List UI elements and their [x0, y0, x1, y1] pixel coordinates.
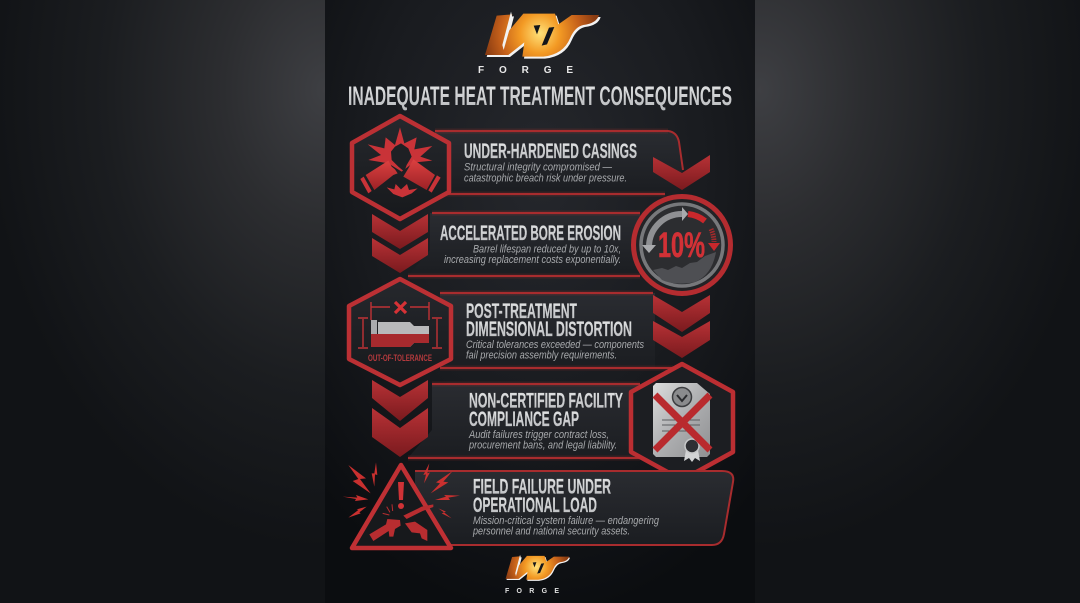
icon: warning triangle with lightning	[343, 462, 460, 548]
heading line 2: DIMENSIONAL DISTORTION	[466, 318, 632, 341]
description line 2: personnel and national security assets.	[472, 526, 630, 538]
description line 2: increasing replacement costs exponentially.	[444, 254, 621, 266]
icon: out-of-tolerance hexagon	[349, 279, 451, 385]
icon: void certificate hexagon	[631, 364, 733, 480]
grey arrow	[642, 207, 688, 253]
firearms	[369, 504, 433, 541]
description: Critical tolerances exceeded — components	[466, 339, 644, 351]
red cross	[655, 395, 710, 450]
heading line 2: COMPLIANCE GAP	[469, 408, 579, 431]
description line 2: procurement bans, and legal liability.	[468, 440, 617, 452]
erosion debris	[653, 252, 716, 284]
certificate	[653, 383, 710, 457]
logo wordmark: FORGE	[478, 65, 573, 76]
description: Mission-critical system failure — endangering	[473, 515, 660, 527]
percentage: 10%	[658, 226, 705, 265]
x mark	[395, 302, 406, 313]
lower burst	[387, 184, 418, 197]
icon: exploding casing hexagon	[352, 116, 449, 219]
chevrons: step 4	[372, 380, 428, 457]
rosette	[684, 439, 700, 462]
side dimensions	[358, 318, 442, 348]
heading: FIELD FAILURE UNDER	[473, 476, 611, 498]
right casing	[403, 159, 441, 193]
seal	[672, 388, 692, 406]
panel: non-certified facility compliance gap	[408, 384, 640, 458]
panel: field failure under operational load	[415, 471, 733, 545]
heading: POST-TREATMENT	[466, 300, 577, 323]
heading: NON-CERTIFIED FACILITY	[469, 390, 623, 412]
red arrow	[708, 229, 720, 251]
chevron: step 1	[653, 155, 710, 190]
heading line 2: OPERATIONAL LOAD	[473, 494, 597, 517]
logo: footer	[505, 555, 570, 595]
description: Audit failures trigger contract loss,	[468, 429, 609, 441]
top dimension	[371, 302, 429, 320]
red arc	[688, 214, 705, 221]
starburst	[368, 127, 432, 172]
distorted casing	[371, 320, 429, 347]
footer wordmark: FORGE	[505, 588, 559, 595]
certificate lines	[662, 420, 700, 431]
heading: ACCELERATED BORE EROSION	[440, 222, 621, 245]
heading: UNDER-HARDENED CASINGS	[464, 140, 637, 163]
left casing	[360, 161, 398, 193]
title: INADEQUATE HEAT TREATMENT CONSEQUENCES	[348, 81, 732, 111]
logo: top	[478, 12, 601, 76]
panel: under-hardened casings	[435, 131, 683, 194]
description line 2: fail precision assembly requirements.	[466, 350, 617, 362]
description: Structural integrity compromised —	[464, 162, 613, 174]
label: OUT-OF-TOLERANCE	[368, 353, 432, 364]
exclamation mark	[398, 482, 404, 509]
icon: 10% lifespan gauge	[634, 196, 730, 294]
description line 2: catastrophic breach risk under pressure.	[464, 172, 627, 184]
description: Barrel lifespan reduced by up to 10x,	[473, 244, 621, 256]
chevrons: step 3	[653, 295, 710, 358]
lightning bolts	[343, 462, 460, 518]
panel: post-treatment dimensional distortion	[440, 293, 673, 368]
panel: accelerated bore erosion	[408, 213, 640, 276]
chevrons: step 2	[372, 214, 428, 273]
